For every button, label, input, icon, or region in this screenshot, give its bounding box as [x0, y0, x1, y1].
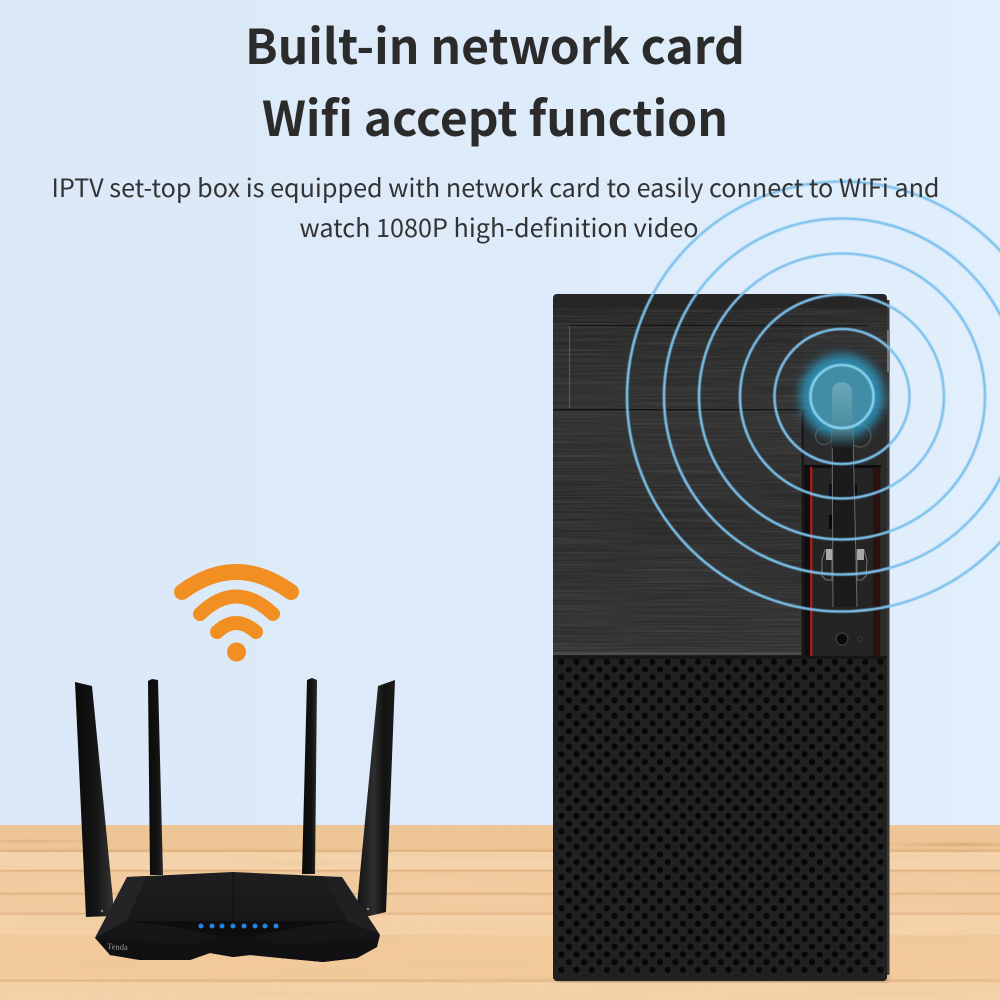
usb clip: [822, 550, 832, 580]
router status LEDs: [198, 924, 278, 928]
perforated mesh: [553, 656, 887, 981]
side edge strip: [886, 300, 890, 975]
antenna body: [832, 382, 857, 607]
buttons: [816, 428, 832, 444]
router antenna far right: [357, 680, 395, 917]
audio jack: [836, 633, 848, 645]
signal rings: [627, 182, 1000, 612]
description line 1: IPTV set-top box is equipped with network card to easily connect to WiFi and: [51, 169, 940, 205]
router antenna inner left: [148, 679, 163, 875]
port bay: [804, 465, 881, 656]
router antenna far left: [75, 682, 113, 917]
tower case: [553, 294, 887, 981]
computer tower: [553, 294, 890, 982]
title line 1: Built-in network card: [245, 8, 745, 78]
signal glow: [800, 354, 884, 448]
router brand: Tenda: [107, 941, 128, 952]
brushed metal panel: [553, 308, 887, 655]
control panel: [801, 409, 887, 656]
router antenna inner right: [302, 678, 317, 874]
router body: [95, 872, 380, 962]
side tab: [886, 330, 890, 372]
tower top lip: [553, 294, 887, 308]
wooden table: [0, 825, 1000, 1000]
title line 2: Wifi accept function: [262, 80, 728, 150]
wifi dongle antenna: [822, 382, 867, 607]
wifi icon: orange: [182, 572, 291, 662]
tower shadow: [558, 976, 888, 982]
description line 2: watch 1080P high-definition video: [299, 209, 699, 245]
router: [75, 678, 395, 962]
usb ports: [829, 484, 833, 496]
